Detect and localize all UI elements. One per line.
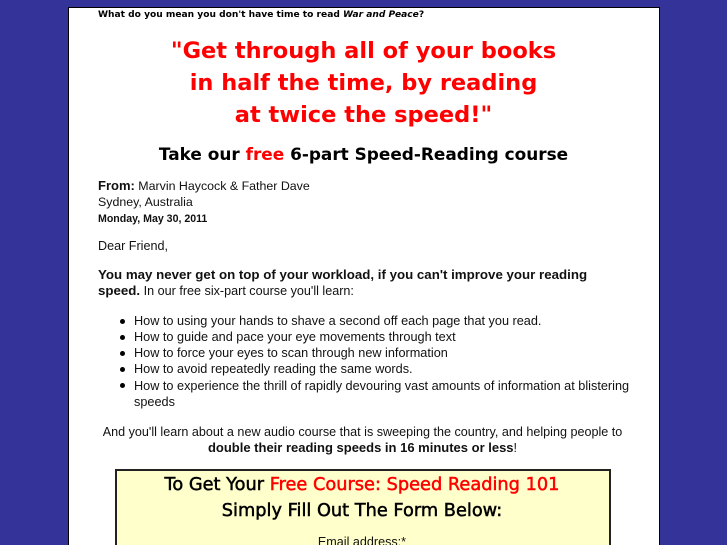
bullet item 5: [134, 379, 629, 409]
sender block: Monday, May 30, 2011: [98, 213, 207, 225]
subheading: Take our free 6-part Speed-Reading course: [159, 144, 568, 164]
intro paragraph: [98, 267, 587, 298]
headline: [171, 38, 556, 128]
bullet item 4: How to avoid repeatedly reading the same words.: [134, 362, 413, 376]
form heading: To Get Your Free Course: Speed Reading 101: [165, 475, 559, 495]
closing paragraph: And you'll learn about a new audio course that is sweeping the country, and helping people to: [103, 425, 622, 439]
headline: in half the time, by reading: [190, 70, 537, 96]
sender block: [98, 178, 310, 225]
closing paragraph: [102, 425, 622, 455]
form heading: [164, 475, 559, 521]
intro paragraph: You may never get on top of your workload, if you can't improve your reading: [98, 267, 587, 282]
bullet item 2: How to guide and pace your eye movements through text: [134, 330, 456, 344]
bullet list: [120, 314, 629, 409]
sender block: Sydney, Australia: [98, 195, 193, 209]
form heading: Simply Fill Out The Form Below:: [222, 501, 502, 521]
bullet item 5: How to experience the thrill of rapidly devouring vast amounts of information at blistering: [134, 379, 629, 393]
headline: "Get through all of your books: [171, 38, 556, 64]
bullet item 3: How to force your eyes to scan through new information: [134, 346, 448, 360]
closing paragraph: double their reading speeds in 16 minutes or less!: [208, 440, 517, 455]
headline: at twice the speed!": [235, 102, 492, 128]
sender block: From: Marvin Haycock & Father Dave: [98, 178, 310, 193]
intro paragraph: speed. In our free six-part course you'll learn:: [98, 283, 354, 298]
panel: sign-up form: [115, 469, 611, 545]
bullet item 1: How to using your hands to shave a second off each page that you read.: [134, 314, 541, 328]
bullet item 5: speeds: [134, 395, 175, 409]
greeting: Dear Friend,: [98, 239, 168, 253]
eyebrow question: What do you mean you don't have time to read War and Peace?: [98, 10, 424, 20]
